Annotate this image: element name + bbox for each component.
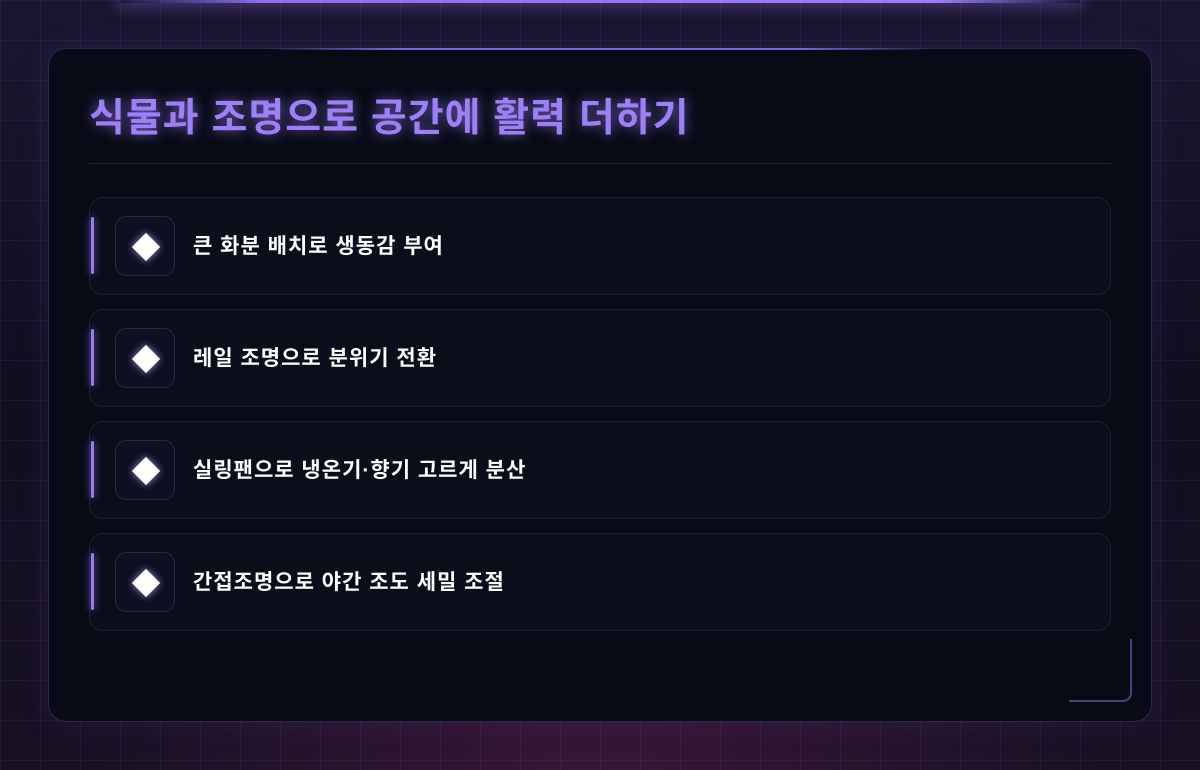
text: 큰 화분 배치로 생동감 부여 [193, 235, 444, 258]
item 3 [89, 421, 1111, 519]
icon: diamond [115, 328, 175, 388]
title: 식물과 조명으로 공간에 활력 더하기 [89, 97, 690, 140]
text: 레일 조명으로 분위기 전환 [193, 347, 437, 370]
item 4 [89, 533, 1111, 631]
corner bracket [1069, 639, 1132, 702]
icon: diamond [115, 216, 175, 276]
icon: diamond [115, 440, 175, 500]
text: 실링팬으로 냉온기·향기 고르게 분산 [193, 459, 526, 482]
item 1 [89, 197, 1111, 295]
top glow line [120, 0, 1080, 3]
item 2 [89, 309, 1111, 407]
icon: diamond [115, 552, 175, 612]
text: 간접조명으로 야간 조도 세밀 조절 [193, 571, 505, 594]
